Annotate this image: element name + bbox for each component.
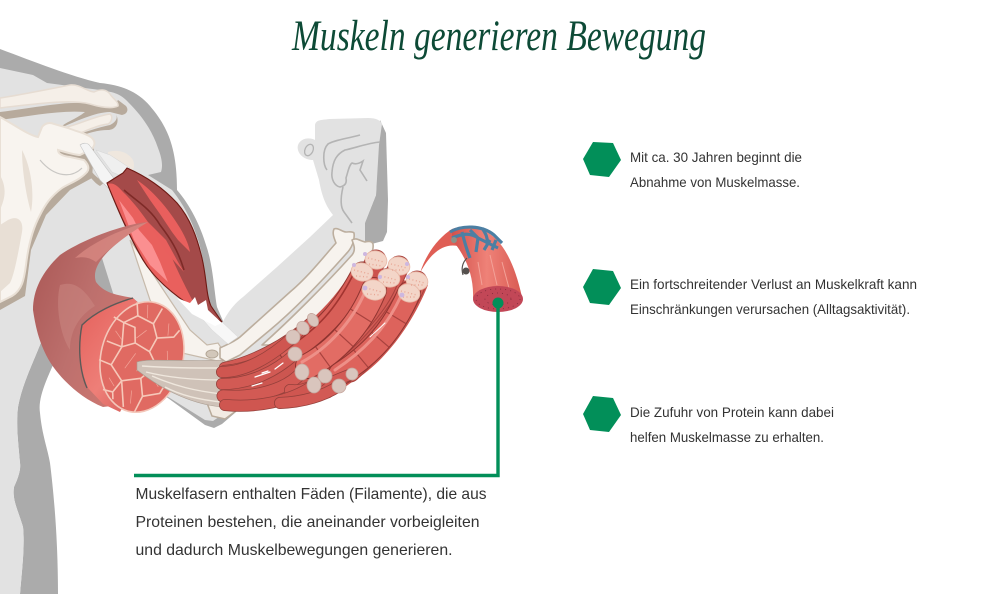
body silhouette bbox=[0, 49, 388, 594]
coracoid process bbox=[67, 114, 112, 134]
callout: muscle fibres: Muskelfasern enthalten Fäden (Filamente), die aus bbox=[136, 486, 486, 503]
humerus shaft and elbow bbox=[130, 240, 240, 419]
fibre end caps bbox=[286, 311, 358, 393]
muscle belly bbox=[33, 222, 170, 407]
seam bbox=[80, 298, 133, 388]
fact 1: Abnahme von Muskelmasse. bbox=[630, 174, 800, 190]
callout: muscle fibres: Proteinen bestehen, die aneinander vorbeigleiten bbox=[136, 514, 480, 531]
biceps muscle bbox=[80, 143, 238, 344]
fact 1 bbox=[583, 142, 802, 190]
fact 3: helfen Muskelmasse zu erhalten. bbox=[630, 429, 824, 445]
fact 1: Mit ca. 30 Jahren beginnt die bbox=[630, 149, 802, 165]
fibre cut end bbox=[473, 286, 523, 312]
tendon bundle bbox=[137, 360, 223, 407]
callout: muscle fibres bbox=[136, 486, 486, 559]
muscle tail streak bbox=[75, 222, 148, 262]
bundle mass bbox=[220, 270, 428, 410]
speckled large caps bbox=[349, 248, 430, 305]
fact 3: Die Zufuhr von Protein kann dabei bbox=[630, 404, 834, 420]
muscle bright band bbox=[80, 298, 165, 412]
blue mesh bbox=[450, 227, 502, 258]
scapula shadow bbox=[0, 119, 94, 310]
biceps divide bbox=[124, 190, 184, 270]
fact 2 bbox=[583, 269, 917, 317]
biceps tendons bbox=[80, 143, 115, 188]
mesh nodules bbox=[451, 237, 457, 243]
long head highlights bbox=[137, 180, 190, 252]
fact 2: Ein fortschreitender Verlust an Muskelkraft kann bbox=[630, 276, 917, 292]
shoulder bones bbox=[0, 85, 134, 310]
forearm shadow and fist bbox=[217, 118, 388, 400]
muscle fibre bundles bbox=[220, 260, 428, 410]
fact 2: Einschränkungen verursachen (Alltagsaktivität). bbox=[630, 301, 910, 317]
forearm bones bbox=[220, 229, 373, 362]
fact 3 bbox=[583, 396, 834, 445]
biceps spindle bbox=[107, 168, 222, 322]
slits between fibres bbox=[252, 363, 283, 386]
single muscle fibre bbox=[420, 226, 523, 312]
leader line bbox=[134, 298, 504, 476]
clavicle bbox=[0, 85, 118, 108]
clavicle shadow bbox=[0, 100, 127, 128]
torso outline shadow bbox=[0, 49, 236, 594]
large fibres bbox=[330, 266, 399, 355]
tendon fray bbox=[177, 297, 222, 326]
title: Muskeln generieren Bewegung bbox=[291, 13, 706, 60]
fibre tail bbox=[420, 229, 458, 273]
short head highlights bbox=[108, 183, 197, 309]
small fibres bbox=[224, 320, 313, 367]
cut face bbox=[89, 293, 195, 421]
large muscle with cut face bbox=[33, 222, 223, 421]
scapula bbox=[0, 117, 94, 302]
humeral head bbox=[108, 151, 134, 172]
fibre body bbox=[452, 226, 522, 307]
torso and upper arm fill bbox=[0, 68, 232, 594]
callout: muscle fibres: und dadurch Muskelbewegungen generieren. bbox=[136, 542, 452, 559]
